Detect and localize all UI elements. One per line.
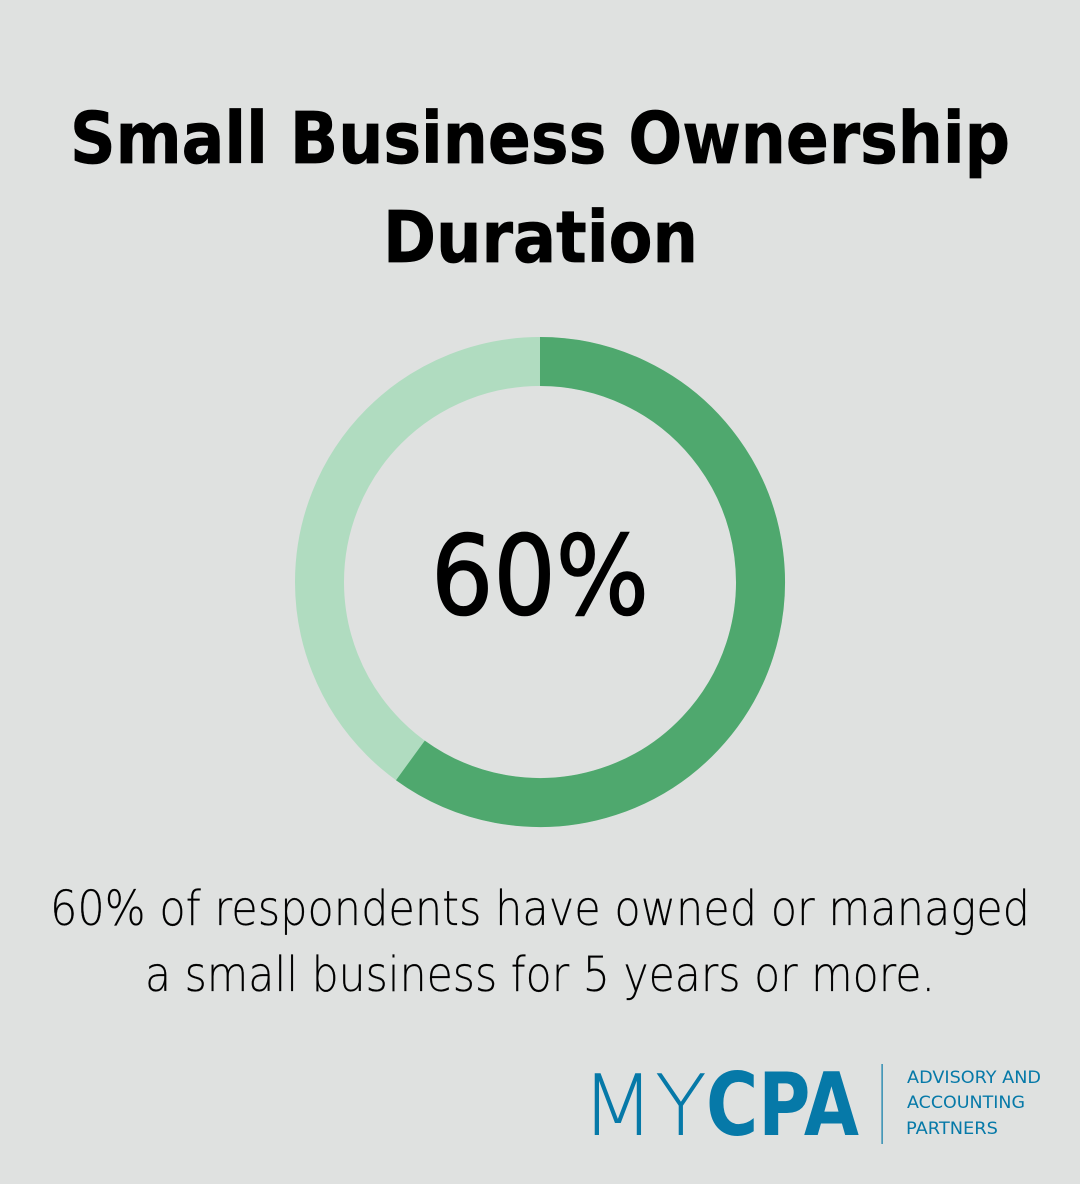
donut chart: 60%: [320, 362, 760, 802]
logo tagline: [906, 1068, 1041, 1139]
description text: [50, 881, 1030, 1003]
logo tagline: ACCOUNTING: [907, 1093, 1025, 1113]
donut value: 60%: [431, 512, 649, 640]
logo wordmark: MY: [581, 1057, 707, 1156]
title: Duration: [383, 196, 698, 279]
logo divider: [882, 1064, 883, 1144]
logo: MYCPA: [581, 1054, 1041, 1156]
description text: a small business for 5 years or more.: [145, 947, 935, 1003]
title: [70, 97, 1010, 279]
logo wordmark: [581, 1054, 859, 1156]
logo wordmark: CPA: [706, 1054, 859, 1156]
logo tagline: ADVISORY AND: [907, 1068, 1041, 1088]
logo tagline: PARTNERS: [906, 1119, 998, 1139]
